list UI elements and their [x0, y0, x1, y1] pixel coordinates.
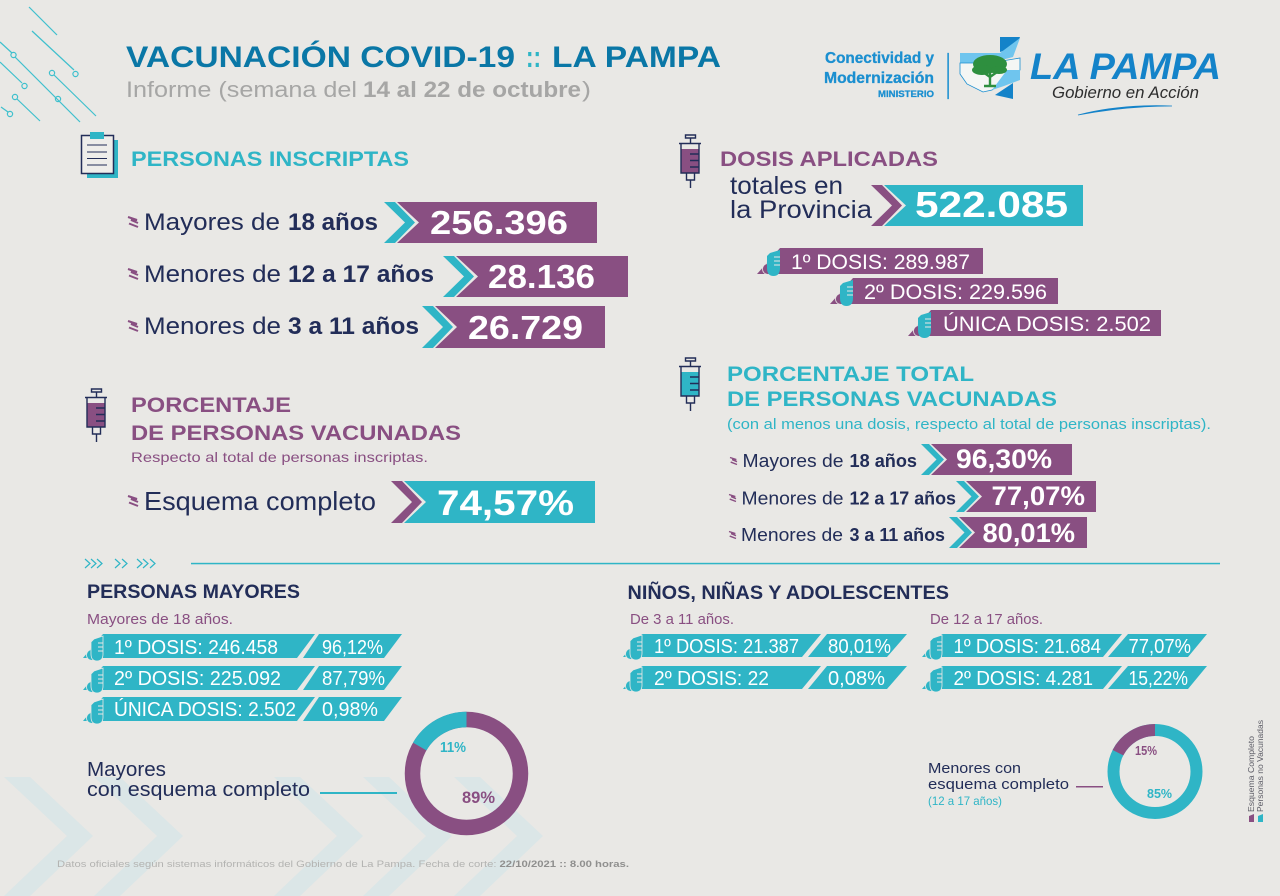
- total label: la Provincia: [730, 196, 872, 224]
- note: respecto al total: Respecto al total de personas inscriptas.: [131, 449, 428, 465]
- heading: personas mayores: PERSONAS MAYORES: [87, 582, 300, 603]
- heading: dosis aplicadas: DOSIS APLICADAS: [720, 147, 938, 171]
- subtitle: ): [582, 77, 591, 102]
- row: menores de 12 a 17: Menores de: [144, 261, 281, 288]
- row: esquema completo: [128, 481, 595, 523]
- bar: 12 a 17 primera dosis: 1º DOSIS: 21.684: [954, 635, 1101, 658]
- label: menores con esquema completo: [928, 760, 1103, 808]
- title: LA PAMPA: [552, 41, 721, 74]
- donut chart: mayores: [412, 719, 520, 828]
- legend: [1246, 720, 1265, 822]
- title: ::: [526, 41, 541, 74]
- bar: primera dosis: 1º DOSIS: 289.987: [791, 251, 970, 274]
- heading: personas inscriptas: PERSONAS INSCRIPTAS: [131, 147, 409, 171]
- note: con al menos una dosis: (con al menos una dosis, respecto al total de personas inscriptas).: [727, 417, 1211, 433]
- bar: primera dosis: [757, 248, 983, 276]
- circuit lines decoration: [0, 7, 96, 122]
- donut chart: menores: [1114, 730, 1196, 813]
- heading: porcentaje total: DE PERSONAS VACUNADAS: [727, 387, 1057, 411]
- row: mayores de 18: 96,30%: [956, 444, 1052, 474]
- title: [126, 40, 721, 74]
- bar: unica dosis: ÚNICA DOSIS: 2.502: [114, 698, 296, 721]
- bar: primera dosis: 96,12%: [322, 636, 383, 659]
- row: menores de 12 a 17: 12 a 17 años: [288, 261, 434, 288]
- bar: 12 a 17 segunda dosis: 2º DOSIS: 4.281: [954, 667, 1093, 690]
- bar: 12 a 17 segunda dosis: [922, 666, 1207, 692]
- heading: porcentaje: PORCENTAJE: [131, 393, 291, 417]
- heading: ninos ninas y adolescentes: NIÑOS, NIÑAS Y ADOLESCENTES: [628, 582, 949, 604]
- bar: segunda dosis: 87,79%: [322, 667, 385, 690]
- logo: ministerio: [824, 50, 949, 99]
- total label: [730, 172, 872, 224]
- subheading: de 12 a 17: De 12 a 17 años.: [930, 612, 1043, 628]
- logo: La Pampa wordmark: LA PAMPA: [1030, 46, 1221, 87]
- bar: primera dosis: [83, 634, 402, 661]
- logo: La Pampa wordmark: Gobierno en Acción: [1052, 84, 1199, 102]
- row: menores de 12 a 17: 12 a 17 años: [850, 488, 956, 508]
- icon: clipboard: [82, 132, 118, 178]
- donut chart: mayores: 11%: [440, 739, 466, 756]
- label: mayores con esquema completo: [87, 759, 397, 801]
- row: mayores de 18: Mayores de: [144, 209, 280, 236]
- logo: ministerio: Conectividad y: [825, 50, 934, 67]
- bar: segunda dosis: [830, 278, 1058, 306]
- icon: syringe teal: [679, 358, 701, 411]
- bar: primera dosis: 1º DOSIS: 246.458: [114, 636, 278, 659]
- row: menores de 12 a 17: 28.136: [488, 258, 595, 295]
- subtitle: 14 al 22 de octubre: [363, 77, 581, 102]
- bar: unica dosis: 0,98%: [322, 698, 378, 721]
- bar: 3 a 11 primera dosis: 80,01%: [828, 635, 891, 658]
- bar: unica dosis: [908, 310, 1161, 338]
- logo: La Pampa wordmark: [1030, 46, 1221, 115]
- bar: segunda dosis: 2º DOSIS: 229.596: [864, 281, 1047, 304]
- label: menores con esquema completo: esquema completo: [928, 776, 1069, 793]
- label: menores con esquema completo: (12 a 17 años): [928, 794, 1002, 808]
- heading: porcentaje: [131, 393, 461, 445]
- row: mayores de 18: [128, 202, 597, 243]
- legend: Esquema Completo: [1246, 736, 1256, 812]
- subtitle: Informe (semana del: [126, 77, 357, 102]
- row: menores de 3 a 11: Menores de: [144, 313, 281, 340]
- panel: ninos, ninas y adolescentes: [623, 582, 1207, 813]
- bar: 3 a 11 primera dosis: [623, 634, 907, 660]
- heading: porcentaje total: PORCENTAJE TOTAL: [727, 362, 974, 386]
- icon: syringe purple: [85, 389, 107, 442]
- bar: segunda dosis: 2º DOSIS: 225.092: [114, 667, 281, 690]
- row: menores de 12 a 17: [128, 256, 628, 297]
- row: menores de 3 a 11: 3 a 11 años: [850, 525, 945, 545]
- row: menores de 3 a 11: [729, 517, 1087, 548]
- bar: 3 a 11 primera dosis: 1º DOSIS: 21.387: [654, 635, 799, 658]
- subtitle: [126, 77, 591, 102]
- background chevrons: [4, 777, 543, 896]
- row: menores de 3 a 11: [128, 306, 605, 348]
- panel: porcentaje de personas vacunadas: [85, 389, 595, 523]
- label: mayores con esquema completo: Mayores: [87, 759, 166, 781]
- section divider with chevrons: [85, 559, 1220, 568]
- row: esquema completo: Esquema completo: [144, 486, 376, 516]
- total value: 522.085: [915, 184, 1068, 225]
- bar: 12 a 17 primera dosis: 77,07%: [1128, 635, 1191, 658]
- legend: Personas no Vacunadas: [1255, 720, 1265, 812]
- row: menores de 12 a 17: Menores de: [742, 488, 844, 508]
- footer source note: Datos oficiales según sistemas informáticos del Gobierno de La Pampa. Fecha de corte:: [57, 859, 496, 870]
- row: menores de 12 a 17: 77,07%: [992, 481, 1085, 511]
- bar: unica dosis: ÚNICA DOSIS: 2.502: [943, 313, 1151, 336]
- donut chart: menores: 85%: [1147, 786, 1172, 801]
- panel: porcentaje total de personas vacunadas: [679, 358, 1211, 548]
- row: menores de 3 a 11: 26.729: [468, 309, 583, 346]
- subheading: de 3 a 11: De 3 a 11 años.: [630, 612, 734, 628]
- donut chart: mayores: 89%: [462, 788, 495, 807]
- bar: 3 a 11 segunda dosis: [623, 666, 907, 692]
- logo: ministerio: MINISTERIO: [878, 89, 934, 99]
- total value: [871, 184, 1083, 226]
- bar: segunda dosis: [83, 666, 402, 693]
- bar: 12 a 17 primera dosis: [922, 634, 1207, 660]
- row: mayores de 18: Mayores de: [742, 451, 844, 471]
- row: mayores de 18: 256.396: [430, 204, 568, 241]
- bar: 3 a 11 segunda dosis: 0,08%: [828, 667, 885, 690]
- title: VACUNACIÓN COVID-19: [126, 40, 515, 74]
- subheading: mayores de 18: Mayores de 18 años.: [87, 612, 233, 628]
- row: esquema completo: 74,57%: [437, 484, 574, 523]
- bar: 3 a 11 segunda dosis: 2º DOSIS: 22: [654, 667, 769, 690]
- heading: porcentaje total: [727, 362, 1057, 411]
- row: menores de 3 a 11: Menores de: [741, 525, 843, 545]
- total label: totales en: [730, 172, 843, 200]
- heading: porcentaje: DE PERSONAS VACUNADAS: [131, 421, 461, 445]
- row: menores de 3 a 11: 80,01%: [982, 518, 1075, 548]
- panel: personas inscriptas: [82, 132, 628, 348]
- panel: dosis aplicadas: [679, 135, 1161, 338]
- bar: 12 a 17 segunda dosis: 15,22%: [1128, 667, 1188, 690]
- row: mayores de 18: 18 años: [288, 209, 378, 236]
- icon: syringe: [679, 135, 701, 188]
- label: mayores con esquema completo: con esquema completo: [87, 779, 310, 801]
- row: mayores de 18: [730, 444, 1072, 475]
- logo: ministerio: Modernización: [824, 70, 934, 87]
- panel: personas mayores: [83, 582, 520, 828]
- row: menores de 3 a 11: 3 a 11 años: [288, 313, 419, 340]
- footer source note: 22/10/2021 :: 8.00 horas.: [500, 859, 629, 870]
- donut chart: menores: 15%: [1135, 743, 1157, 758]
- logo: La Pampa map and tree: [960, 37, 1020, 99]
- label: menores con esquema completo: Menores con: [928, 760, 1021, 777]
- row: menores de 12 a 17: [729, 481, 1096, 512]
- footer source note: [57, 859, 629, 870]
- bar: unica dosis: [83, 697, 402, 724]
- row: mayores de 18: 18 años: [850, 451, 917, 471]
